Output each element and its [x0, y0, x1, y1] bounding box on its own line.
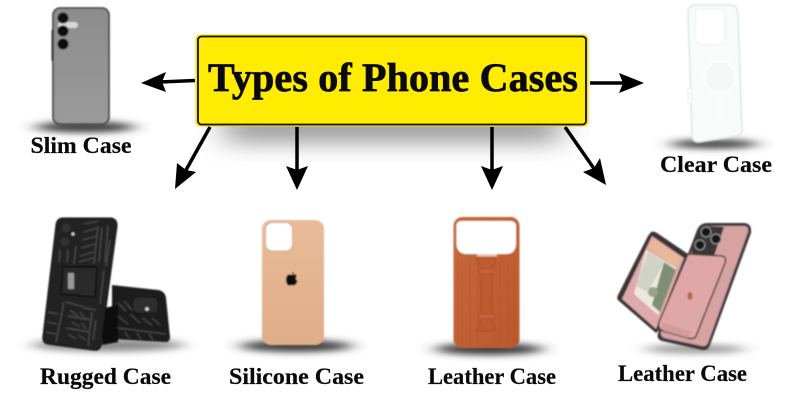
- phone shadow: clear: [670, 140, 758, 148]
- phone shadow: slim: [35, 122, 135, 132]
- panel: rugged case: [32, 218, 184, 390]
- phone shadow: wallet: [645, 344, 745, 354]
- title: Types of Phone Cases: [208, 55, 578, 100]
- label: silicone case: Silicone Case: [229, 364, 364, 390]
- icon: silicone phone case: [262, 220, 324, 345]
- label: clear case: Clear Case: [660, 152, 772, 178]
- title box shadow: [225, 108, 560, 144]
- icon: slim phone case: [52, 8, 109, 124]
- label: rugged case: Rugged Case: [40, 364, 171, 390]
- panel: wallet leather case: [617, 223, 751, 387]
- icon: leather phone case with strap: [454, 217, 520, 348]
- label: leather case: Leather Case: [428, 364, 556, 390]
- label: wallet leather case: Leather Case: [618, 361, 747, 387]
- arrow: to leather case: [481, 127, 503, 190]
- arrow: to clear case: [590, 73, 644, 93]
- panel: leather case: [428, 217, 556, 390]
- phone shadow: silicone: [240, 340, 352, 352]
- panel: clear case: [660, 5, 772, 178]
- title box: [196, 35, 588, 126]
- arrow: to rugged case: [175, 127, 210, 189]
- panel: slim case: [30, 8, 135, 159]
- icon: apple logo: [286, 272, 298, 286]
- icon: rugged phone case: [43, 218, 170, 350]
- arrow: to silicone case: [286, 127, 308, 190]
- icon: clear phone case: [688, 5, 742, 142]
- arrow: to wallet leather case: [565, 127, 606, 185]
- arrow: to slim case: [141, 72, 195, 92]
- label: slim case: Slim Case: [30, 133, 132, 159]
- panel: silicone case: [229, 220, 364, 390]
- phone shadow: rugged: [32, 338, 184, 352]
- phone shadow: leather: [435, 343, 543, 355]
- icon: wallet leather phone case: [617, 223, 751, 350]
